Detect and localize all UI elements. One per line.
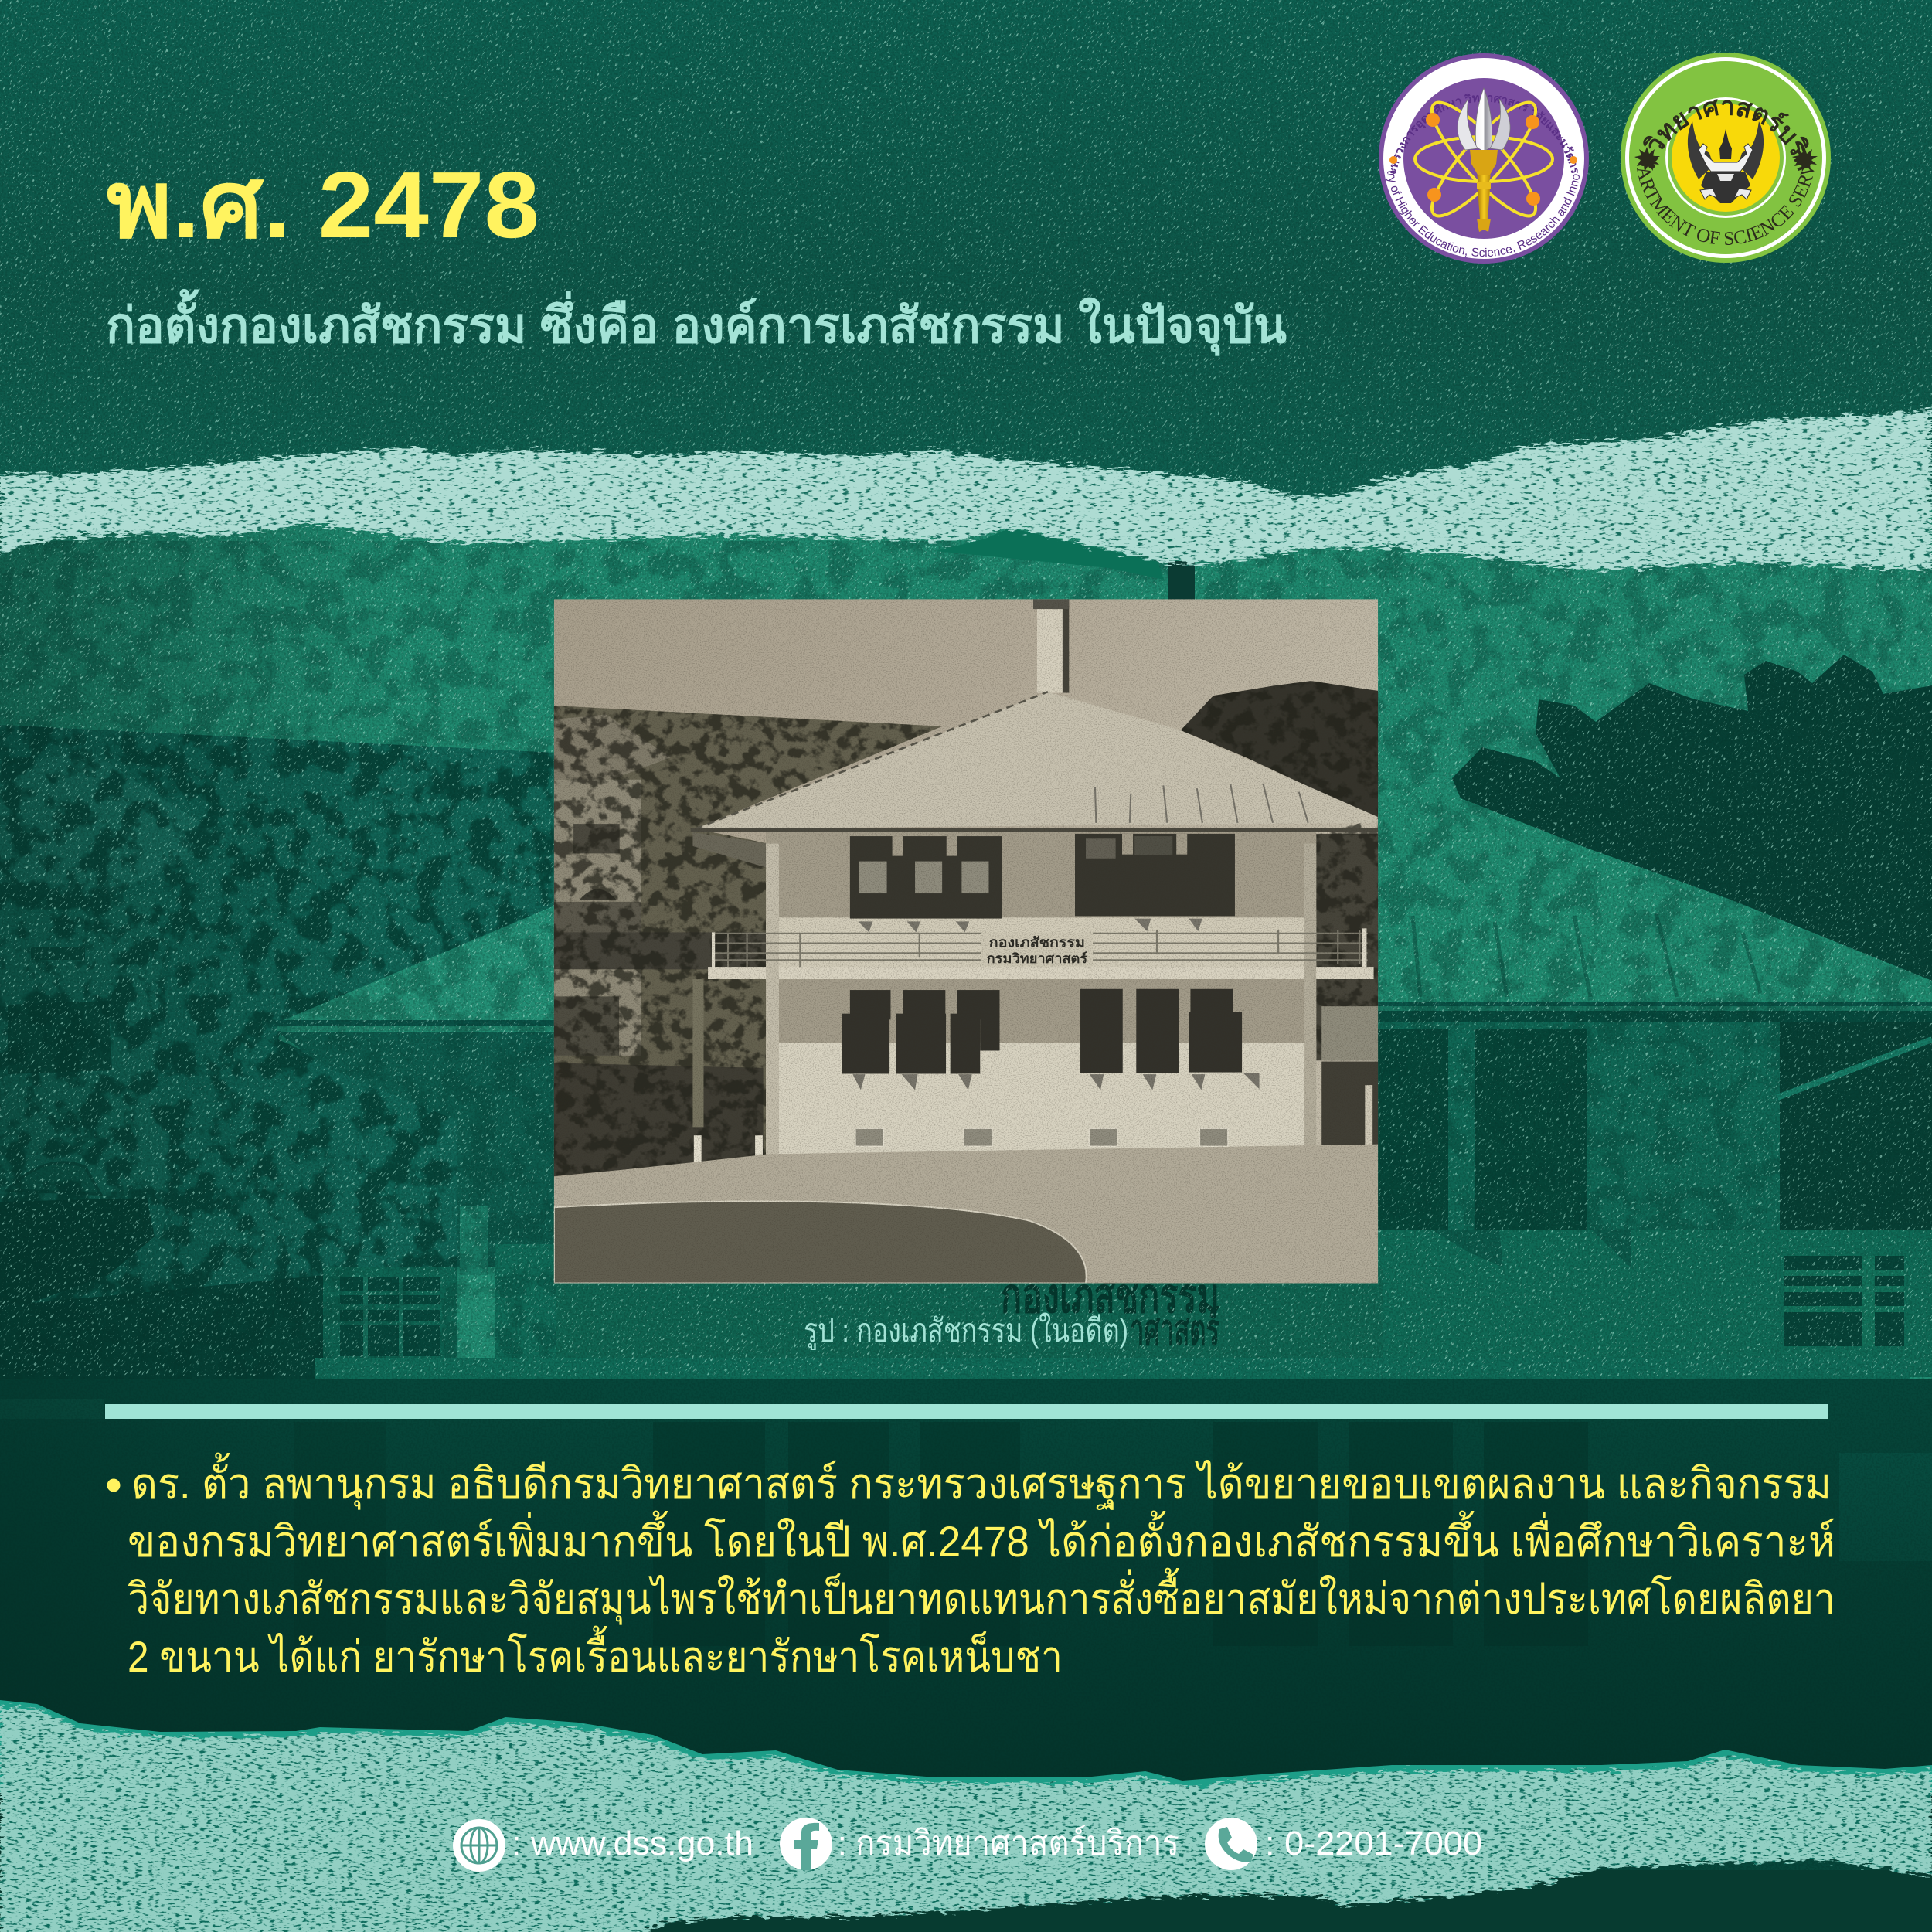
body text: ของกรมวิทยาศาสตร์เพิ่มมากขึ้น โดยในปี พ.ศ.2478 ได้ก่อตั้งกองเภสัชกรรมขึ้น เพื่อศึกษาวิเคราะห์	[128, 1511, 1835, 1566]
photo: hip roof	[696, 692, 1378, 829]
photo: upper windows	[850, 834, 1235, 919]
icon: phone	[1205, 1818, 1257, 1870]
body text: ดร. ตั้ว ลพานุกรม อธิบดีกรมวิทยาศาสตร์ กระทรวงเศรษฐการ ได้ขยายขอบเขตผลงาน และกิจกรรม	[131, 1453, 1832, 1510]
subtitle: ก่อตั้งกองเภสัชกรรม ซึ่งคือ องค์การเภสัชกรรม ในปัจจุบัน	[106, 289, 1287, 356]
icon: garuda emblem	[1688, 121, 1764, 203]
photo: building walls	[708, 832, 1374, 1154]
ghost: chimney top above photo	[1168, 561, 1195, 600]
ghost: sign lettering behind caption: าศาสตร์	[1130, 1305, 1219, 1354]
photo: balcony railing and sign: กรมวิทยาศาสตร์	[987, 951, 1088, 966]
background: torn paper upper section	[0, 0, 1932, 587]
body text: 2 ขนาน ได้แก่ ยารักษาโรคเรื้อนและยารักษาโรคเหน็บชา	[128, 1626, 1063, 1681]
icon: atom orbits	[1415, 90, 1553, 228]
ghost: balcony railing left	[323, 1267, 457, 1360]
icon: right star	[1792, 147, 1818, 172]
footer: contact row	[453, 1818, 1482, 1872]
torn paper strip: bottom	[0, 1700, 1932, 1932]
phone number text: : 0-2201-7000	[1265, 1825, 1482, 1862]
icon: globe	[453, 1819, 505, 1872]
photo: balcony railing and sign	[712, 928, 1368, 968]
photo: circular lawn	[554, 1201, 1087, 1284]
ghost: balcony railing right	[1784, 1256, 1904, 1346]
icon: left star	[1634, 147, 1660, 172]
caption: รูป : กองเภสัชกรรม (ในอดีต)	[804, 1312, 1128, 1350]
facebook page text: : กรมวิทยาศาสตร์บริการ	[838, 1825, 1179, 1862]
texture: paper speckle	[0, 0, 1932, 1376]
photo: lower windows	[842, 989, 1242, 1073]
website text: : www.dss.go.th	[512, 1825, 753, 1862]
ghost: sign lettering behind caption	[1001, 1270, 1219, 1354]
ghost: sign lettering behind caption: กองเภสัชกรรม	[1001, 1270, 1219, 1323]
photo: historic pharmaceutical division building	[553, 599, 1379, 1283]
background: faded building photo in green duotone	[0, 510, 1932, 1932]
title: พ.ศ. 2478	[107, 152, 539, 257]
photo: balcony railing and sign: กองเภสัชกรรม	[989, 934, 1085, 950]
body text	[107, 1453, 1835, 1681]
photo: basement vents	[855, 1128, 1228, 1146]
icon: trident	[1458, 88, 1510, 232]
divider	[105, 1404, 1828, 1419]
photo: driveway	[554, 1145, 1378, 1284]
photo: chimney	[1033, 599, 1069, 692]
torn paper strip: top	[0, 410, 1932, 570]
icon: facebook	[780, 1818, 832, 1870]
background: dark shadow under torn strip	[936, 528, 1164, 580]
